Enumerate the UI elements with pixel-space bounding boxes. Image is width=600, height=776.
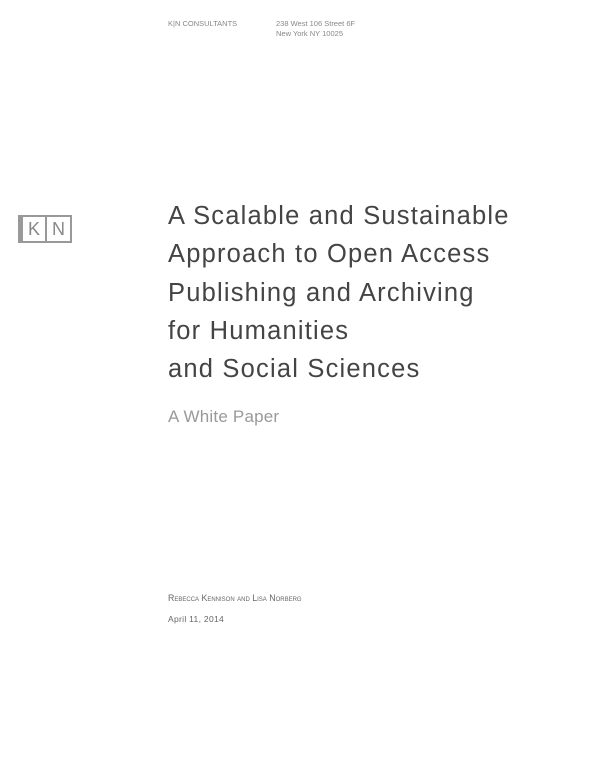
header: address xyxy=(276,19,355,38)
title: Approach to Open Access xyxy=(168,240,490,268)
subtitle: A White Paper xyxy=(168,407,279,426)
authors: Rebecca Kennison and Lisa Norberg xyxy=(168,593,302,603)
header: address: New York NY 10025 xyxy=(276,29,343,38)
header: company name: K|N CONSULTANTS xyxy=(168,19,237,28)
logo: KN xyxy=(18,215,72,243)
header: address: 238 West 106 Street 6F xyxy=(276,19,355,28)
title xyxy=(168,202,510,383)
title: Publishing and Archiving xyxy=(168,279,475,307)
logo: KN: N xyxy=(52,219,65,239)
title: and Social Sciences xyxy=(168,355,420,383)
logo: KN: K xyxy=(28,219,40,239)
date: April 11, 2014 xyxy=(168,614,224,624)
title: for Humanities xyxy=(168,317,349,345)
title: A Scalable and Sustainable xyxy=(168,202,510,230)
